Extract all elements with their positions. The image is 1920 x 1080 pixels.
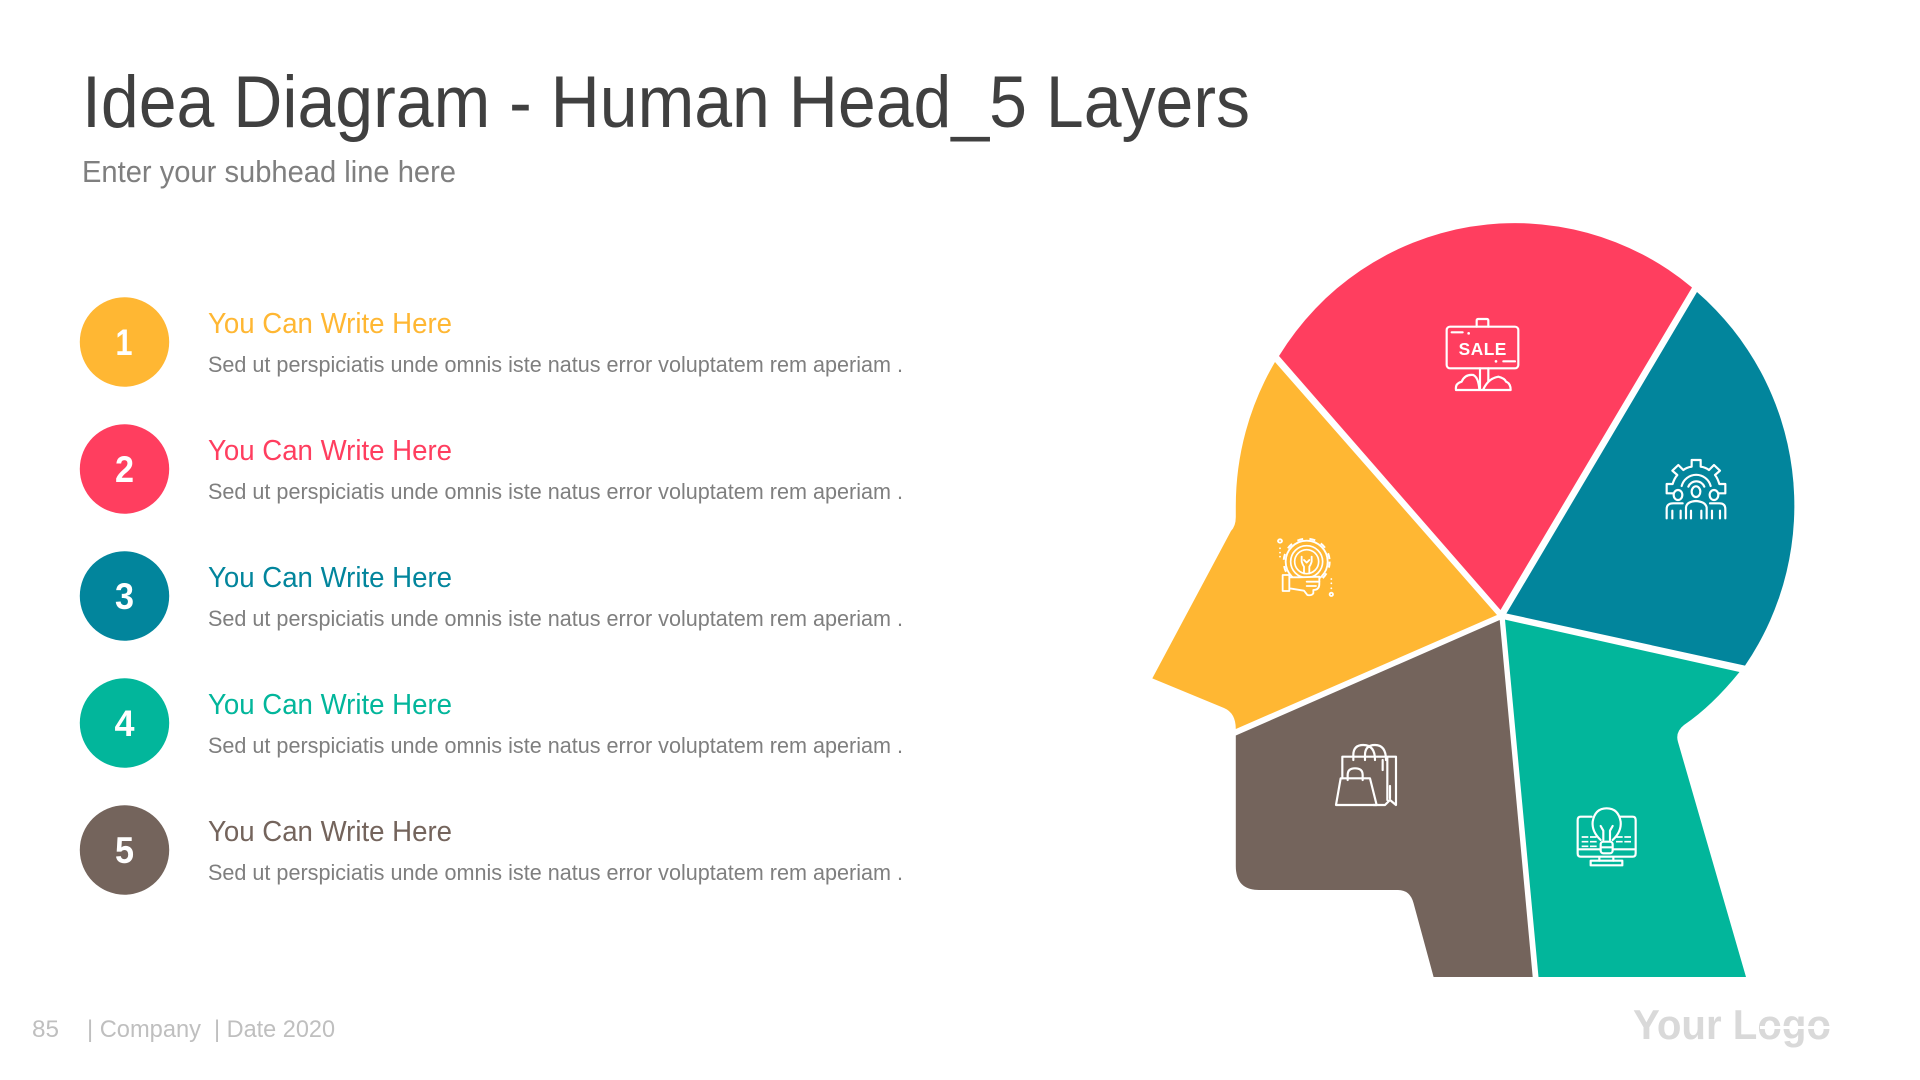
item 1 bbox=[80, 297, 903, 387]
footer: page number and company: | Company bbox=[87, 1016, 201, 1043]
item 1: Sed ut perspiciatis unde omnis iste natus error voluptatem rem aperiam . bbox=[208, 352, 903, 377]
logo: Your Logo bbox=[1633, 1001, 1831, 1048]
item 3: 3 bbox=[115, 576, 134, 617]
icon: shopping bags bbox=[1336, 745, 1396, 805]
icon: team gear bbox=[1667, 460, 1725, 518]
footer: page number and company: | Date 2020 bbox=[214, 1016, 335, 1043]
item 5 bbox=[80, 805, 903, 895]
head layer: blue back bbox=[1506, 292, 1794, 666]
item 4: Sed ut perspiciatis unde omnis iste natus error voluptatem rem aperiam . bbox=[208, 733, 903, 758]
head layer: red crown bbox=[1279, 223, 1692, 610]
item 5: Sed ut perspiciatis unde omnis iste natus error voluptatem rem aperiam . bbox=[208, 860, 903, 885]
item 2: 2 bbox=[115, 449, 134, 490]
item 3: You Can Write Here bbox=[208, 562, 452, 594]
item 4 bbox=[80, 678, 903, 768]
title: Idea Diagram - Human Head_5 Layers bbox=[82, 62, 1250, 143]
item 4: You Can Write Here bbox=[208, 689, 452, 721]
item 2: Sed ut perspiciatis unde omnis iste natus error voluptatem rem aperiam . bbox=[208, 479, 903, 504]
item 2: You Can Write Here bbox=[208, 435, 452, 467]
icon: hand with wrench and gear bbox=[1278, 539, 1333, 596]
icon: sale sign: SALE bbox=[1459, 339, 1506, 359]
item 5: 5 bbox=[115, 830, 134, 871]
human head diagram bbox=[1152, 223, 1794, 977]
head layer: yellow face bbox=[1152, 362, 1497, 729]
icon: sale sign bbox=[1447, 319, 1518, 390]
head layer: green neck bbox=[1505, 620, 1746, 977]
item 3 bbox=[80, 551, 903, 641]
item 5: You Can Write Here bbox=[208, 816, 452, 848]
icon: monitor with light bulb bbox=[1578, 808, 1636, 865]
item 1: 1 bbox=[116, 322, 132, 363]
item 4: 4 bbox=[114, 703, 135, 744]
footer: page number and company bbox=[32, 1016, 335, 1043]
item 2 bbox=[80, 424, 903, 514]
list of five items bbox=[80, 297, 903, 895]
footer: page number and company: 85 bbox=[32, 1016, 59, 1043]
head layer: brown jaw bbox=[1236, 620, 1533, 977]
item 3: Sed ut perspiciatis unde omnis iste natus error voluptatem rem aperiam . bbox=[208, 606, 903, 631]
item 1: You Can Write Here bbox=[208, 308, 452, 340]
subhead: Enter your subhead line here bbox=[82, 154, 456, 189]
